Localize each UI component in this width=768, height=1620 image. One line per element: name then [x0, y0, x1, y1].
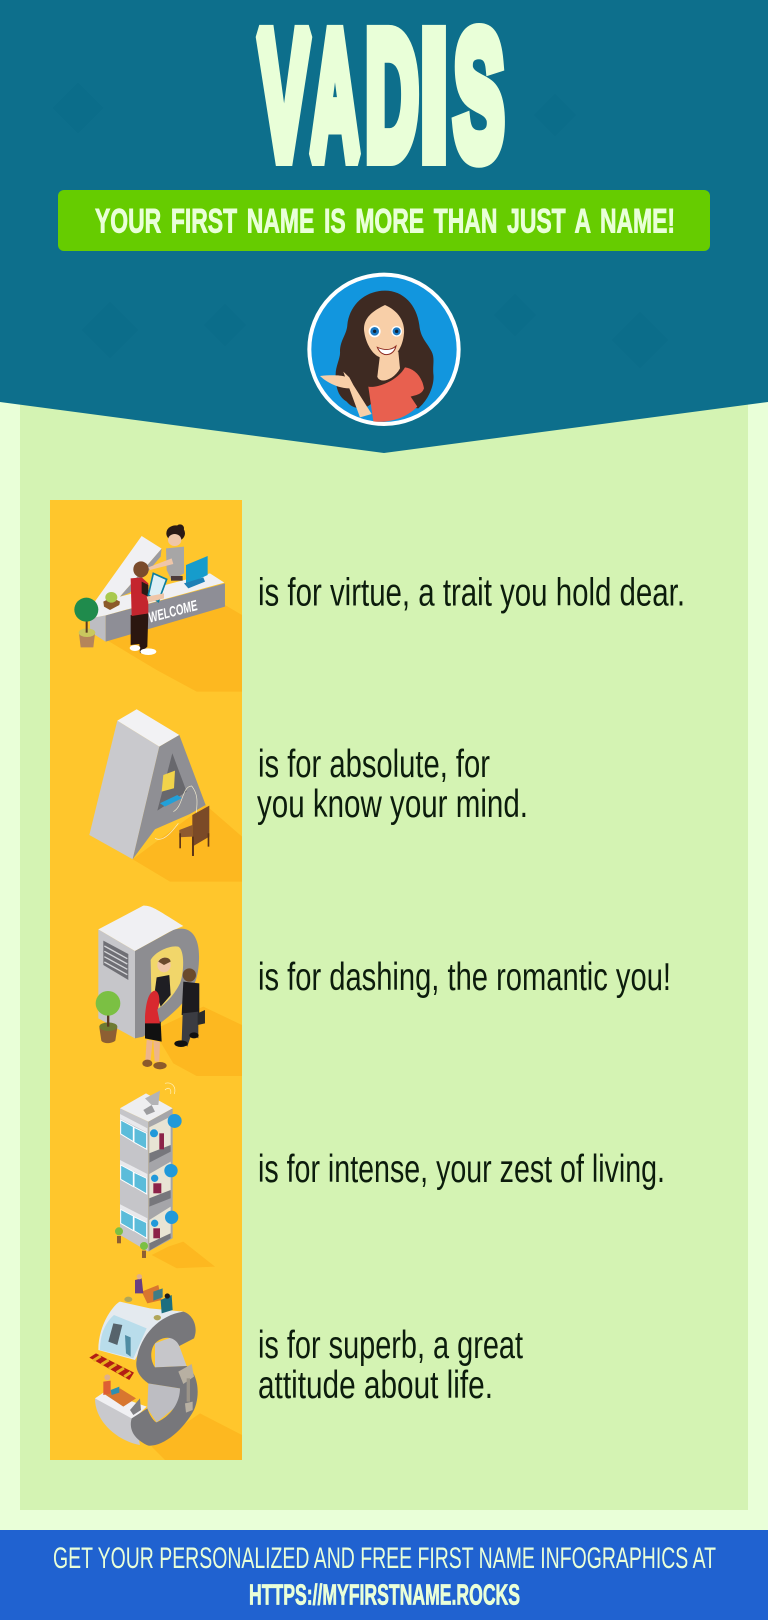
illustration: V reception desk — [74, 524, 242, 692]
receptionist — [166, 547, 184, 581]
title: D — [366, 0, 418, 195]
upper desk and workers — [142, 1285, 162, 1303]
title: A — [310, 0, 360, 195]
footer: HTTPS://MYFIRSTNAME.ROCKS — [249, 1580, 520, 1612]
smile — [377, 346, 396, 355]
vent — [103, 941, 128, 980]
chair — [192, 806, 209, 847]
arm and hand — [320, 372, 372, 417]
text: S: attitude about life. — [258, 1364, 493, 1407]
footer — [0, 1530, 768, 1620]
title — [259, 0, 504, 196]
text: A: is for absolute, for — [258, 743, 490, 786]
illustration: I tower — [115, 1083, 215, 1268]
plant — [79, 633, 95, 647]
man with briefcase — [182, 982, 199, 1015]
text: A: you know your mind. — [257, 783, 528, 826]
text: S — [258, 1324, 523, 1407]
woman — [145, 1022, 162, 1042]
text: A — [257, 743, 528, 826]
man facing — [155, 975, 171, 1007]
illustration panel: yellow column — [50, 500, 242, 1460]
text: S: is for superb, a great — [258, 1324, 523, 1367]
content panel — [20, 380, 748, 1510]
eyes — [369, 325, 381, 337]
shirt — [368, 367, 424, 422]
title: I — [420, 0, 448, 195]
title: V — [259, 0, 309, 196]
subtitle banner — [58, 190, 710, 251]
lower desk and worker — [103, 1388, 136, 1407]
illustration: D letter — [96, 906, 242, 1076]
monitor — [186, 556, 208, 585]
customer — [131, 613, 148, 653]
avatar: woman in circle — [309, 275, 459, 424]
illustration: V reception desk: WELCOME — [147, 598, 200, 627]
hair — [336, 291, 434, 408]
header banner — [0, 0, 768, 453]
plant — [99, 1027, 117, 1043]
illustration: S letter — [89, 1274, 242, 1460]
illustration: A letter — [89, 709, 242, 882]
title: S — [454, 0, 504, 196]
neck and face — [377, 352, 400, 381]
